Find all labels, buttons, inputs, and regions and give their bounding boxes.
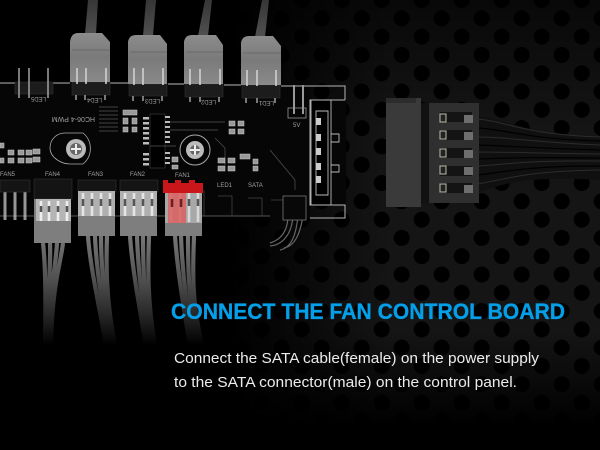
top LED connector 4 <box>241 36 281 86</box>
PCB silk text: SATA <box>248 183 263 189</box>
body text: to the SATA connector(male) on the control panel. <box>174 374 517 391</box>
PCB silk text: LED3 <box>144 97 160 103</box>
bottom fan connector 4 <box>165 191 202 236</box>
body text <box>174 350 540 391</box>
PCB silk text: LED4 <box>86 96 102 102</box>
5V header <box>288 85 306 118</box>
SATA female connector <box>386 98 479 207</box>
PCB silk text: LED1 <box>217 183 233 189</box>
PCB silk text: FAN5 <box>0 172 16 178</box>
chip and traces <box>99 107 295 190</box>
fan 5 pins left edge <box>5 190 25 220</box>
SATA cable wires <box>478 116 600 192</box>
control board PCB <box>0 68 346 220</box>
small connector block <box>283 196 306 220</box>
top LED connector 3 <box>184 35 223 85</box>
headers under LED connectors <box>72 82 280 103</box>
bottom fan connector 3 <box>120 191 157 236</box>
bottom fan connector 2 <box>78 191 115 236</box>
PCB silk text <box>0 95 300 189</box>
PCB silk text: FAN2 <box>130 172 146 178</box>
SATA male connector on the board <box>311 100 339 205</box>
4-pin header left, LED5 <box>15 68 53 98</box>
PCB silk text: LED5 <box>30 95 46 101</box>
mounting hole outline left <box>50 133 90 164</box>
PCB silk text: LED1 <box>258 99 274 105</box>
bottom fan connector 1 <box>34 199 71 243</box>
screw left <box>66 139 86 159</box>
top LED connector 2 <box>128 35 167 85</box>
PCB silk text: FAN1 <box>175 173 191 179</box>
lower right header sockets <box>204 190 300 216</box>
PCB silk text: LED2 <box>200 98 216 104</box>
PCB silk text: HC06-4 PWM <box>52 115 95 122</box>
top LED connector 1 <box>70 33 110 84</box>
bottom fan cables <box>43 236 202 345</box>
fan headers <box>0 179 158 199</box>
cables: top LED connectors <box>85 0 269 37</box>
screw right <box>180 135 210 165</box>
PCB silk text: FAN3 <box>88 172 104 178</box>
PCB silk text: FAN4 <box>45 172 61 178</box>
body text: Connect the SATA cable(female) on the power supply <box>174 350 540 367</box>
small components <box>0 110 258 171</box>
highlighted red header and pins <box>163 180 203 223</box>
SATA contacts <box>440 112 473 193</box>
small SATA lead cables under board <box>270 215 303 250</box>
PCB silk text: 5V <box>293 123 300 129</box>
heading: CONNECT THE FAN CONTROL BOARD <box>171 299 565 324</box>
